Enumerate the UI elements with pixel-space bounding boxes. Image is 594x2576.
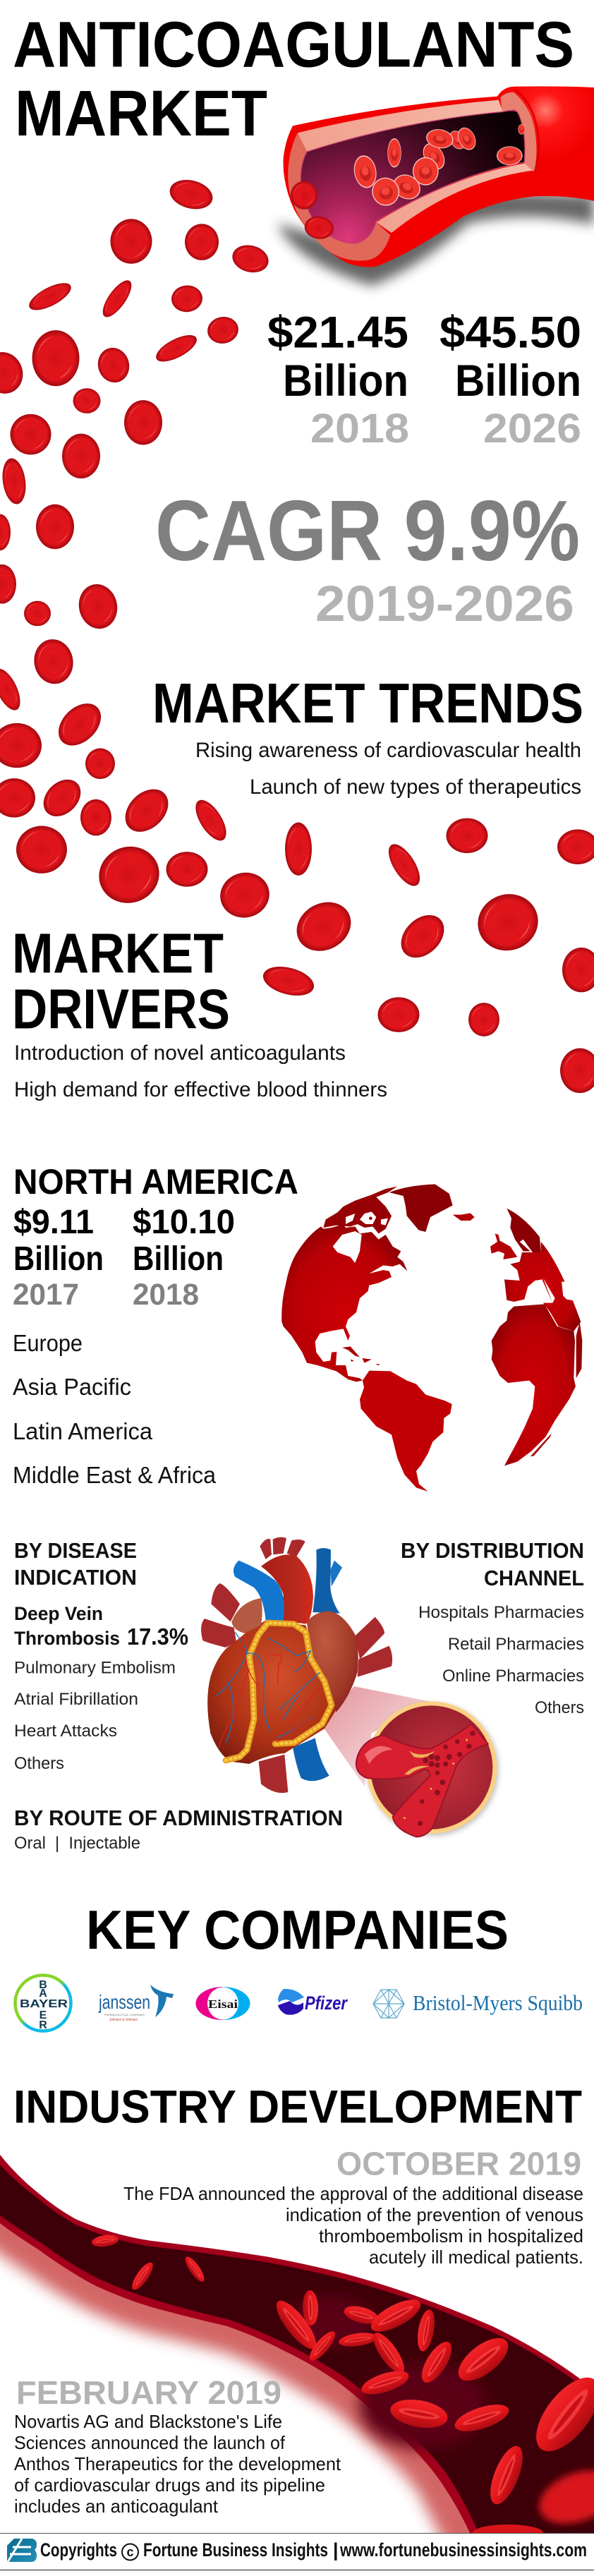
logo: Janssen: janssen — [98, 1991, 150, 2013]
october 2019 development: indication of the prevention of venous — [286, 2204, 583, 2225]
footer: c — [126, 2545, 134, 2559]
title: MARKET — [15, 78, 267, 150]
by disease indication: Pulmonary Embolism — [14, 1658, 176, 1678]
regional figures: Billion — [13, 1240, 104, 1278]
logo: Bayer: B — [39, 1979, 47, 1991]
market trends: Rising awareness of cardiovascular health — [195, 739, 581, 762]
footer: Fortune Business Insights — [143, 2539, 328, 2560]
CAGR — [155, 483, 580, 632]
footer — [0, 2533, 594, 2570]
regional figures: Europe — [13, 1330, 83, 1356]
logo: Bayer: R — [39, 2019, 47, 2031]
regional figures: $9.11 — [13, 1204, 94, 1241]
regional figures: 2017 — [13, 1278, 79, 1312]
icon: world globe — [281, 1184, 582, 1492]
logo: Janssen: PHARMACEUTICAL COMPANIES — [104, 2013, 145, 2016]
title — [13, 8, 574, 150]
by disease indication: INDICATION — [14, 1565, 137, 1590]
blood cells: middle stream — [0, 636, 594, 1093]
october 2019 development — [123, 2145, 583, 2268]
by distribution channel: CHANNEL — [484, 1566, 584, 1590]
logo: Janssen — [98, 1985, 174, 2022]
by distribution channel: Others — [535, 1698, 584, 1717]
logo: Bristol-Myers Squibb — [373, 1990, 583, 2018]
blood cells: upper-left cluster — [0, 176, 272, 632]
market trends — [152, 672, 583, 799]
regional figures: Billion — [133, 1240, 224, 1278]
market drivers: DRIVERS — [12, 978, 230, 1040]
by disease indication: 17.3% — [127, 1623, 188, 1650]
market size figures — [267, 308, 581, 452]
by disease indication: Atrial Fibrillation — [14, 1690, 138, 1709]
illustration: cut-away blood vessel — [277, 86, 594, 286]
logo: Pfizer — [278, 1989, 348, 2015]
logo: Pfizer: Pfizer — [305, 1993, 348, 2014]
by route of administration: Oral | Injectable — [14, 1834, 140, 1853]
market drivers: MARKET — [12, 921, 224, 985]
by distribution channel: Online Pharmacies — [442, 1667, 584, 1686]
illustration: blood vessel with cells — [0, 2155, 594, 2547]
market drivers: High demand for effective blood thinners — [14, 1078, 387, 1101]
market size figures: 2026 — [483, 406, 581, 452]
february 2019 development — [14, 2374, 341, 2517]
by route of administration — [14, 1806, 343, 1853]
market size figures: 2018 — [310, 406, 409, 452]
regional figures: $10.10 — [133, 1204, 235, 1241]
CAGR: 2019-2026 — [315, 576, 574, 632]
logo: Bayer — [16, 1976, 71, 2031]
logo: Bayer: BAYER — [20, 1998, 68, 2010]
market size figures: Billion — [283, 356, 408, 406]
by disease indication: BY DISEASE — [14, 1538, 137, 1563]
logo: Eisai — [196, 1987, 250, 2020]
october 2019 development: acutely ill medical patients. — [369, 2247, 583, 2268]
market drivers — [12, 921, 387, 1101]
february 2019 development: includes an anticoagulant — [14, 2496, 219, 2517]
february 2019 development: Sciences announced the launch of — [14, 2432, 286, 2453]
market size figures: $21.45 — [267, 308, 408, 357]
february 2019 development: FEBRUARY 2019 — [16, 2374, 281, 2411]
logo: Eisai: Eisai — [208, 1997, 238, 2011]
february 2019 development: Anthos Therapeutics for the development — [14, 2453, 341, 2474]
by disease indication: Others — [14, 1754, 64, 1773]
regional figures — [13, 1162, 298, 1488]
february 2019 development: of cardiovascular drugs and its pipeline — [14, 2474, 325, 2496]
regional figures: NORTH AMERICA — [13, 1162, 298, 1202]
by disease indication — [14, 1538, 188, 1773]
february 2019 development: Novartis AG and Blackstone's Life — [14, 2411, 282, 2432]
by distribution channel: Hospitals Pharmacies — [418, 1603, 584, 1622]
october 2019 development: OCTOBER 2019 — [337, 2145, 581, 2182]
footer: | — [333, 2539, 339, 2560]
by distribution channel — [401, 1538, 584, 1717]
logo: Bayer: A — [39, 1988, 47, 2000]
regional figures: 2018 — [133, 1278, 199, 1312]
october 2019 development: The FDA announced the approval of the additional disease — [123, 2183, 583, 2204]
by disease indication: Deep Vein — [14, 1603, 103, 1624]
by route of administration: BY ROUTE OF ADMINISTRATION — [14, 1806, 343, 1830]
logo: Bayer: E — [40, 2009, 47, 2021]
market drivers: Introduction of novel anticoagulants — [14, 1041, 346, 1065]
by distribution channel: BY DISTRIBUTION — [401, 1538, 584, 1563]
regional figures: Asia Pacific — [13, 1374, 131, 1400]
by distribution channel: Retail Pharmacies — [448, 1635, 584, 1654]
market trends: Launch of new types of therapeutics — [250, 775, 581, 799]
market size figures: Billion — [455, 356, 581, 406]
logo: Janssen: Johnson & Johnson — [109, 2018, 138, 2022]
icon: heart with artery magnifier — [201, 1537, 499, 1837]
market size figures: $45.50 — [440, 308, 581, 357]
key companies heading: KEY COMPANIES — [86, 1899, 509, 1961]
regional figures: Latin America — [13, 1418, 153, 1444]
by disease indication: Thrombosis — [14, 1628, 120, 1649]
regional figures: Middle East & Africa — [13, 1462, 217, 1488]
october 2019 development: thromboembolism in hospitalized — [319, 2225, 583, 2247]
footer: Copyrights — [40, 2539, 117, 2560]
by disease indication: Heart Attacks — [14, 1722, 117, 1741]
